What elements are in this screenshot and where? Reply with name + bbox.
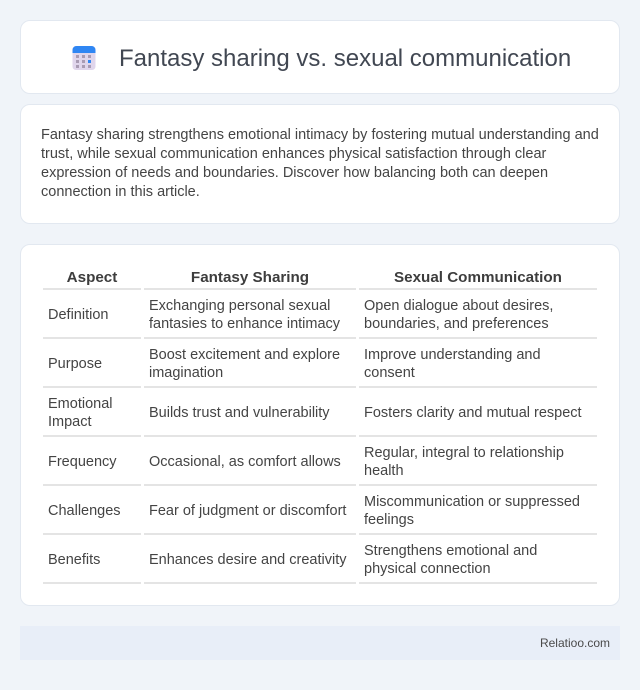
row: definition: fantasies to enhance intimacy	[149, 316, 340, 332]
panel: comparison table	[20, 244, 620, 606]
row: challenges: Miscommunication or suppressed	[364, 494, 580, 510]
text block: introduction: connection in this article.	[41, 184, 200, 200]
table header: Fantasy Sharing	[191, 269, 309, 286]
row: emotional impact: Impact	[48, 414, 92, 430]
table header: Sexual Communication	[394, 269, 562, 286]
footer	[20, 626, 620, 660]
row: definition: Open dialogue about desires,	[364, 298, 553, 314]
row: benefits: Strengthens emotional and	[364, 543, 537, 559]
row: frequency	[48, 445, 564, 479]
row: challenges: Fear of judgment or discomfort	[149, 503, 346, 519]
row: emotional impact: Builds trust and vulnerability	[149, 405, 330, 421]
table header: Aspect	[67, 269, 117, 286]
text block: introduction	[41, 127, 599, 200]
row: frequency: Regular, integral to relationship	[364, 445, 564, 461]
row: frequency: Occasional, as comfort allows	[149, 454, 341, 470]
row: frequency: health	[364, 463, 404, 479]
row: benefits: physical connection	[364, 561, 491, 577]
footer credit: Relatioo.com	[540, 636, 610, 650]
row: purpose: Purpose	[48, 356, 102, 372]
row: frequency: Frequency	[48, 454, 117, 470]
panel: introduction	[20, 104, 620, 224]
row: benefits: Benefits	[48, 552, 100, 568]
row: purpose: consent	[364, 365, 415, 381]
row: emotional impact	[48, 396, 582, 430]
panel: title card	[20, 20, 620, 94]
row: emotional impact: Fosters clarity and mutual respect	[364, 405, 582, 421]
row: definition	[48, 298, 553, 332]
icon: calendar	[72, 46, 96, 70]
row: purpose	[48, 347, 541, 381]
row: emotional impact: Emotional	[48, 396, 112, 412]
text block: introduction: Fantasy sharing strengthens emotional intimacy by fostering mutual understanding and	[41, 127, 599, 143]
row: definition: boundaries, and preferences	[364, 316, 549, 332]
row: challenges	[48, 494, 580, 528]
row: definition: Exchanging personal sexual	[149, 298, 330, 314]
table header	[67, 269, 562, 286]
row: benefits	[48, 543, 537, 577]
row: purpose: imagination	[149, 365, 223, 381]
row: purpose: Improve understanding and	[364, 347, 541, 363]
row: definition: Definition	[48, 307, 108, 323]
row: challenges: Challenges	[48, 503, 121, 519]
row: benefits: Enhances desire and creativity	[149, 552, 346, 568]
text block: introduction: expression of needs and boundaries. Discover how balancing both can deepen	[41, 165, 548, 181]
title: Fantasy sharing vs. sexual communication	[119, 45, 571, 72]
row: purpose: Boost excitement and explore	[149, 347, 340, 363]
text block: introduction: trust, while sexual communication enhances physical satisfaction through clear	[41, 146, 546, 162]
row: challenges: feelings	[364, 512, 414, 528]
